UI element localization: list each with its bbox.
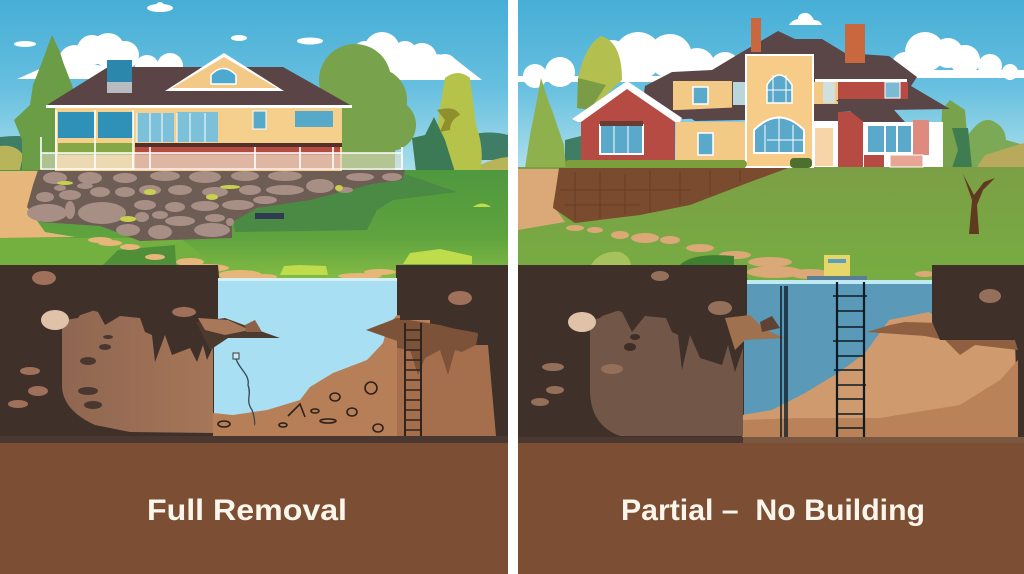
shrubs: [591, 252, 734, 267]
exposed soil left: [62, 310, 213, 433]
rock ledge left: [196, 318, 280, 350]
stone wall: [27, 170, 405, 241]
small pine: [412, 108, 460, 172]
shrub by tower: [790, 158, 812, 168]
hedge: [565, 160, 747, 168]
dark drips right: [932, 265, 1024, 340]
bare soil bank: [553, 168, 788, 223]
grass tufts: [280, 204, 491, 275]
clouds: [14, 2, 482, 80]
soil wall right: [932, 265, 1024, 443]
soil wall right: [396, 265, 508, 443]
ladder: [833, 282, 867, 443]
distant hills: [968, 120, 1020, 167]
label: full removal: Full Removal: [147, 494, 347, 527]
rock ledge: [725, 315, 785, 350]
moss: [57, 181, 343, 222]
pockets in wall: [78, 335, 113, 409]
panel: partial no building: [518, 0, 1024, 574]
root tangle: [41, 310, 69, 330]
house: [41, 53, 402, 171]
dark drips left: [590, 305, 744, 372]
yellow tree: [577, 36, 622, 110]
label: partial no building: Partial – No Building: [621, 494, 925, 527]
soil wall left: [0, 265, 222, 443]
filled soil mass: [742, 312, 1018, 440]
sky: [518, 0, 1024, 170]
pockets in wall: [531, 271, 1001, 406]
wall holes: [624, 334, 640, 351]
steel piles: [781, 286, 787, 443]
ladder: [405, 323, 421, 443]
bottom soil band: [518, 443, 1024, 574]
water: [214, 281, 397, 415]
right exposed soil: [397, 345, 496, 436]
exposed soil left: [590, 310, 743, 436]
broken cable: [233, 353, 255, 425]
grass: [0, 170, 508, 282]
drain grate: [255, 213, 284, 219]
root tangle: [568, 312, 596, 332]
pine tree: [525, 78, 566, 168]
pine tree: [14, 35, 75, 170]
right trees: [942, 100, 967, 167]
round tree: [319, 44, 416, 172]
bottom soil band: [0, 443, 508, 574]
water: [744, 284, 932, 443]
bare tree: [963, 174, 995, 234]
stone path: [0, 171, 75, 238]
soil floor shadow: [0, 436, 508, 443]
lawn: [518, 167, 1024, 282]
dark drips left: [68, 310, 212, 362]
house: [572, 18, 950, 167]
soil floor shadow: [518, 437, 1024, 443]
stone path: [518, 169, 565, 230]
fallen rubble: [213, 315, 430, 440]
panel: full removal: [0, 0, 508, 574]
yellow tree: [438, 73, 482, 172]
distant hills: [0, 132, 508, 170]
sign: [807, 255, 867, 280]
sky: [0, 0, 508, 175]
rubble stones: [218, 382, 383, 432]
soil wall left: [518, 265, 750, 443]
floor shadow under wall: [518, 437, 743, 443]
clouds: [518, 13, 1024, 88]
